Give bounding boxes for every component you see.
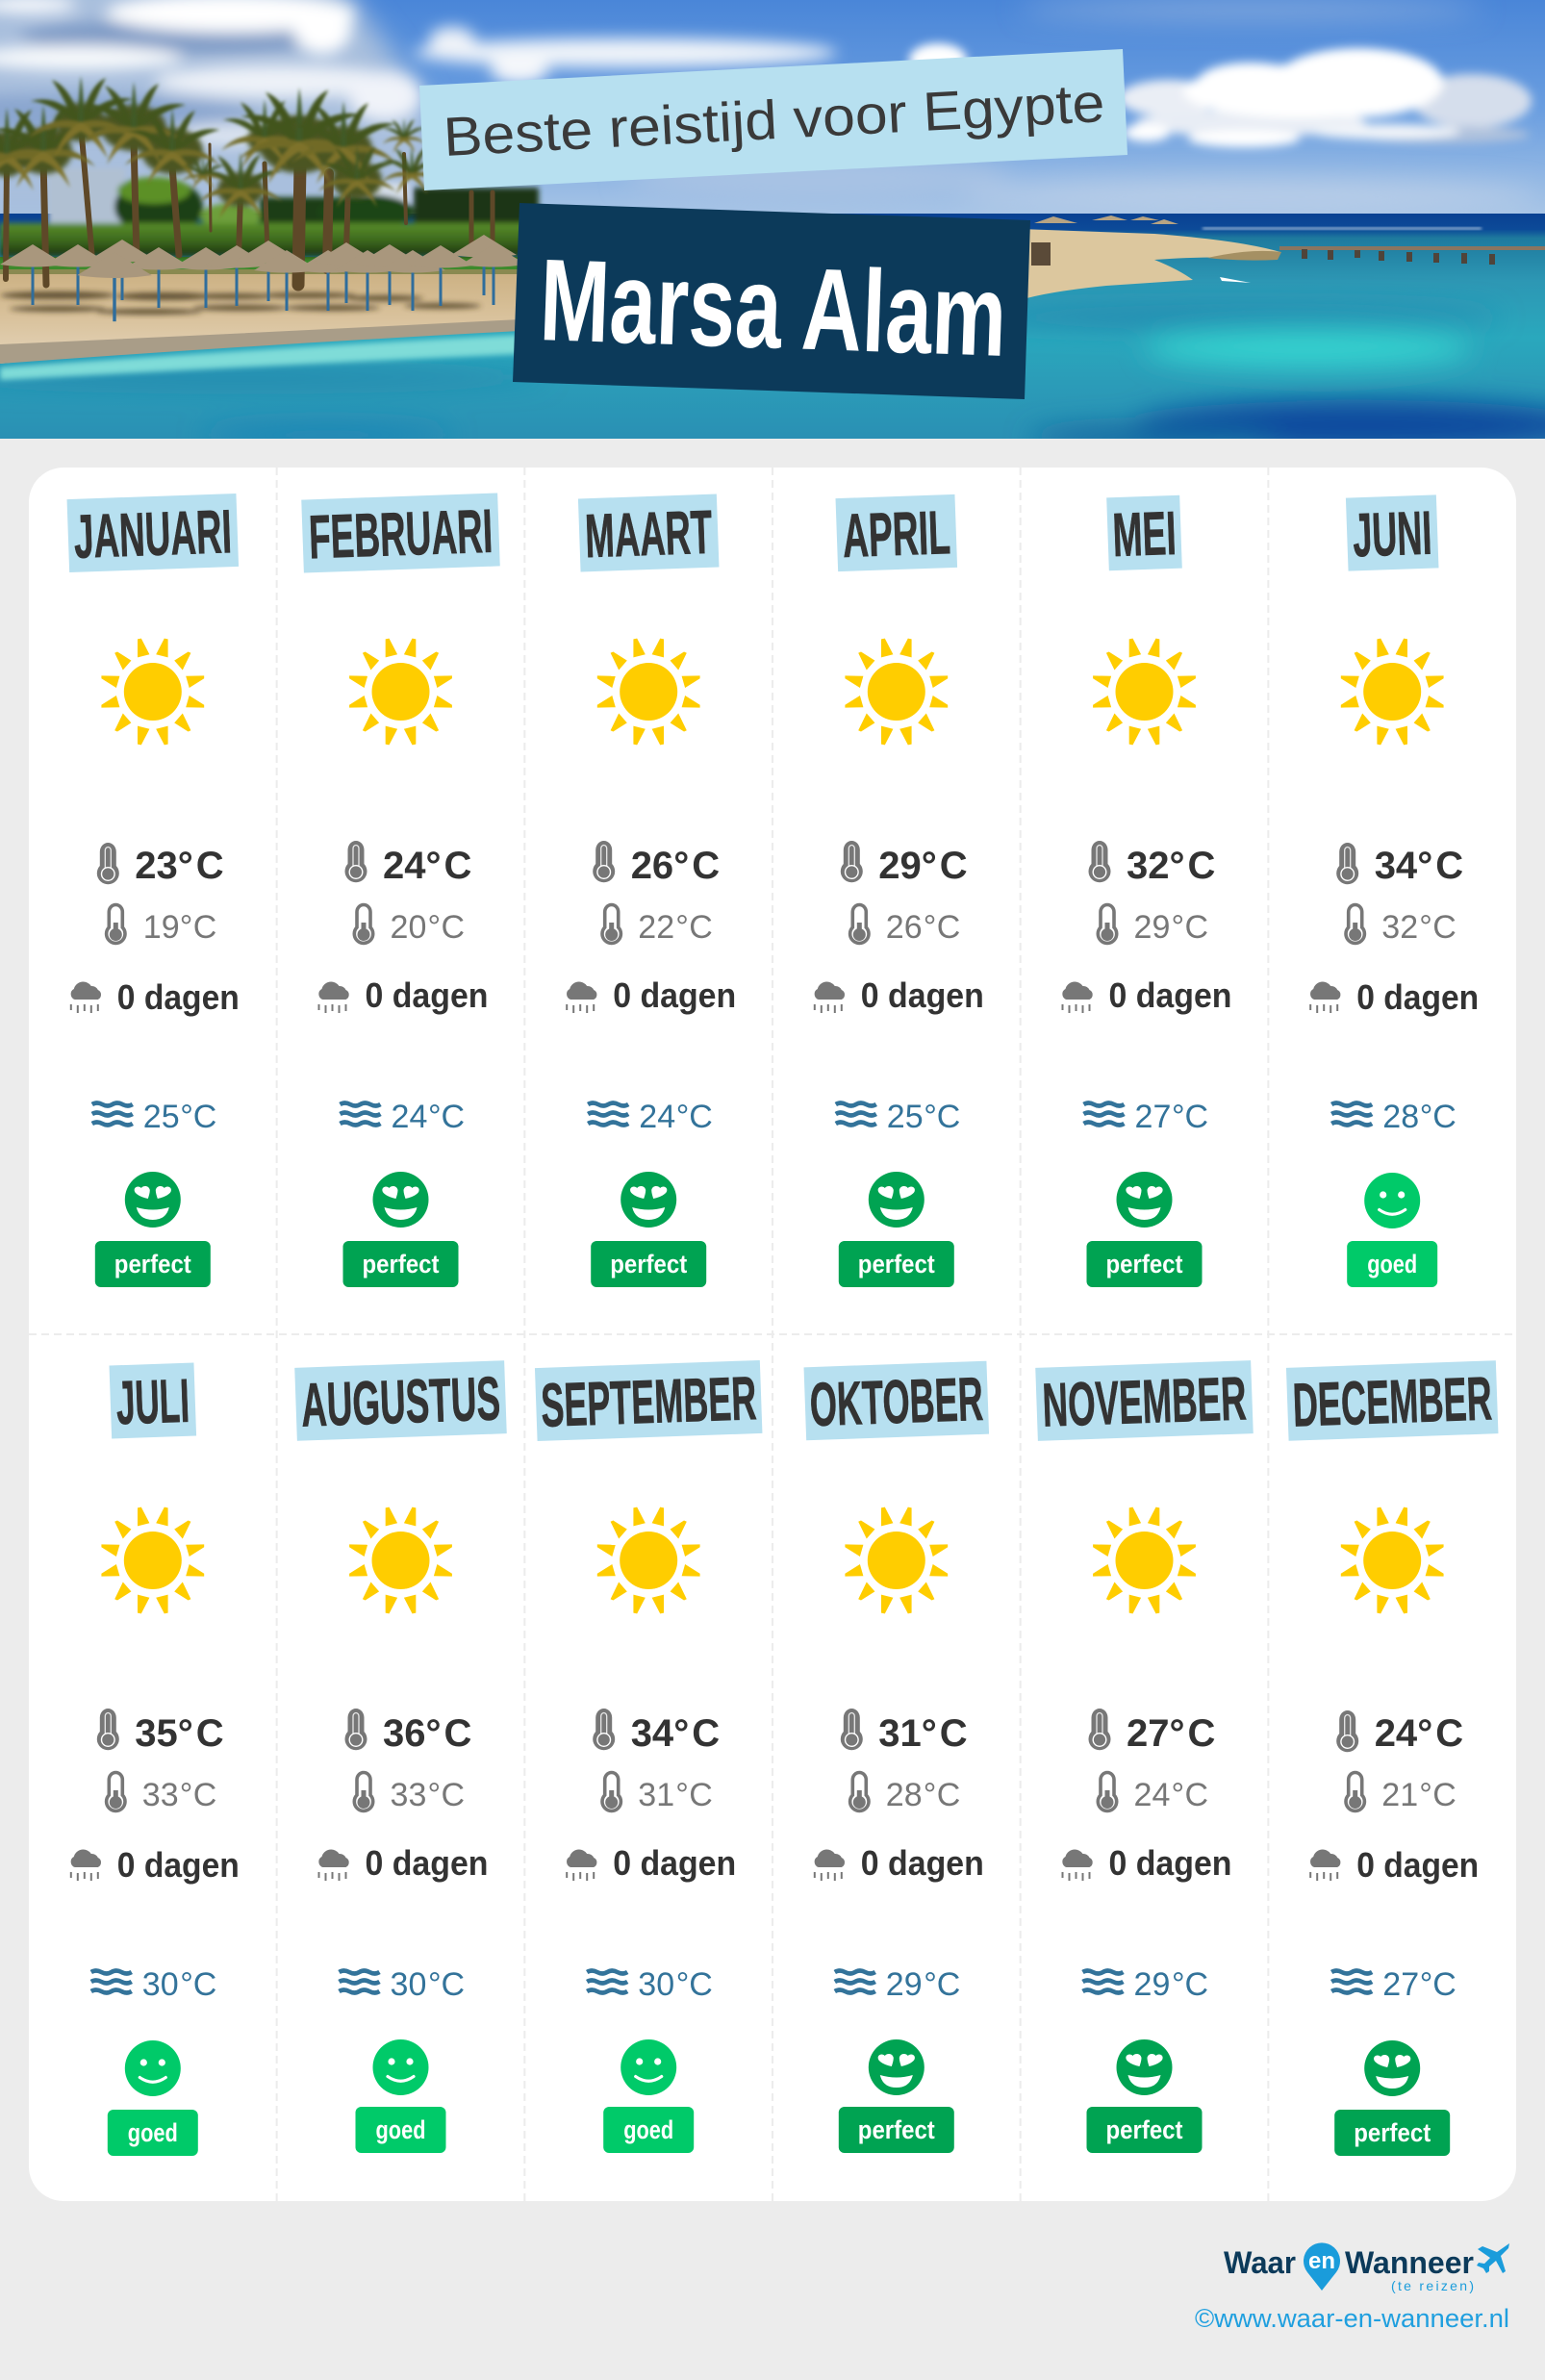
- palm trunks: [6, 125, 493, 285]
- month: september: [535, 1360, 762, 2153]
- max temperature: 24°C: [383, 845, 471, 887]
- icon: thermometer low: [1346, 904, 1364, 943]
- month label: [1106, 495, 1182, 570]
- pier: [1279, 246, 1545, 265]
- icon: sun: [101, 1507, 204, 1613]
- rain days: 0 dagen: [861, 975, 984, 1015]
- min temperature: 33°C: [391, 1777, 465, 1813]
- icon: perfect smiley: [1116, 1172, 1172, 1228]
- rating badge: [1087, 2107, 1203, 2153]
- icon: rain cloud: [318, 1850, 349, 1881]
- rain days: 0 dagen: [117, 977, 240, 1017]
- icon: perfect smiley: [1116, 2039, 1172, 2095]
- max temperature: 31°C: [878, 1712, 968, 1755]
- month label: [578, 494, 719, 571]
- rating badge: [839, 1241, 954, 1287]
- icon: sun: [597, 1507, 700, 1613]
- icon: thermometer low: [354, 1772, 373, 1810]
- rating badge: [95, 1241, 211, 1287]
- rain days: 0 dagen: [366, 1843, 489, 1883]
- min temperature: 22°C: [638, 909, 713, 946]
- icon: thermometer low: [1098, 904, 1117, 943]
- month label: [535, 1360, 762, 1441]
- icon: sun: [1093, 639, 1196, 745]
- month label: [301, 493, 500, 573]
- icon: waves: [587, 1970, 627, 1993]
- min temperature: 26°C: [886, 909, 960, 946]
- icon: thermometer low: [850, 1772, 869, 1810]
- water temperature: 27°C: [1135, 1099, 1208, 1135]
- hero photo: beach resort with palms and turquoise sea: [0, 0, 1545, 450]
- icon: thermometer low: [850, 904, 869, 943]
- month label: NOVEMBER: [1041, 1363, 1248, 1440]
- icon: thermometer high: [1336, 843, 1358, 884]
- icon: airplane: [1477, 2243, 1509, 2273]
- max temperature: 29°C: [878, 845, 968, 887]
- rain days: 0 dagen: [861, 1843, 984, 1883]
- icon: sun: [845, 639, 948, 745]
- min temperature: 31°C: [638, 1777, 713, 1813]
- destination banner: Marsa Alam: Marsa Alam: [538, 234, 1009, 381]
- palm crown masses: [0, 103, 382, 207]
- water temperature: 24°C: [391, 1099, 465, 1135]
- icon: perfect smiley: [125, 1172, 181, 1228]
- icon: waves: [1083, 1970, 1124, 1993]
- max temperature: 36°C: [383, 1712, 471, 1755]
- logo: Waar en Wanneer: Wanneer: [1345, 2245, 1474, 2280]
- month: juni: [1310, 494, 1479, 1287]
- icon: rain cloud: [1062, 982, 1093, 1013]
- rating badge: perfect: [362, 1250, 440, 1279]
- logo: Waar en Wanneer: Waar: [1224, 2245, 1296, 2280]
- logo: Waar en Wanneer: (te reizen): [1391, 2278, 1474, 2293]
- icon: rain cloud: [1062, 1850, 1093, 1881]
- icon: map pin: en: [1308, 2248, 1335, 2274]
- month label: [110, 1362, 196, 1439]
- rating badge: [356, 2107, 446, 2153]
- title banner: Beste reistijd voor Egypte: [419, 49, 1127, 190]
- icon: rain cloud: [318, 982, 349, 1013]
- month label: MEI: [1111, 498, 1178, 570]
- rating badge: perfect: [858, 1250, 935, 1279]
- rating badge: [1334, 2110, 1450, 2156]
- icon: perfect smiley: [373, 1172, 429, 1228]
- icon: sun: [597, 639, 700, 745]
- icon: good smiley: [125, 2040, 181, 2096]
- rating badge: perfect: [610, 1250, 687, 1279]
- logo: Waar en Wanneer: [1224, 2242, 1509, 2293]
- max temperature: 23°C: [135, 845, 224, 887]
- min temperature: 21°C: [1381, 1777, 1456, 1813]
- month label: JUNI: [1352, 498, 1432, 570]
- calendar panel: 12 months: [29, 468, 1516, 2201]
- icon: sun: [1341, 639, 1444, 745]
- water temperature: 30°C: [142, 1966, 216, 2003]
- icon: rain cloud: [1310, 982, 1340, 1013]
- min temperature: 28°C: [886, 1777, 960, 1813]
- water temperature: 24°C: [639, 1099, 713, 1135]
- month label: AUGUSTUS: [300, 1363, 501, 1440]
- rain days: 0 dagen: [613, 1843, 736, 1883]
- icon: rain cloud: [815, 1850, 845, 1881]
- icon: sun: [101, 639, 204, 745]
- water temperature: 25°C: [143, 1099, 216, 1135]
- rating badge: [839, 2107, 954, 2153]
- icon: rain cloud: [567, 1850, 596, 1881]
- icon: perfect smiley: [621, 1172, 676, 1228]
- icon: waves: [836, 1102, 876, 1126]
- month label: FEBRUARI: [308, 496, 494, 571]
- icon: thermometer low: [107, 904, 125, 943]
- rain days: 0 dagen: [1356, 977, 1479, 1017]
- palm crowns: [0, 76, 443, 218]
- title banner: Beste reistijd voor Egypte: Beste reistijd voor Egypte: [442, 72, 1106, 168]
- icon: good smiley: [1364, 1173, 1420, 1228]
- icon: perfect smiley: [869, 2039, 924, 2095]
- month: juli: [71, 1362, 240, 2156]
- month: oktober: [804, 1361, 989, 2153]
- month: april: [815, 494, 984, 1287]
- icon: perfect smiley: [869, 1172, 924, 1228]
- rain days: 0 dagen: [1356, 1845, 1479, 1885]
- rain days: 0 dagen: [117, 1845, 240, 1885]
- icon: map pin: [1304, 2242, 1340, 2291]
- water temperature: 25°C: [887, 1099, 960, 1135]
- icon: thermometer high: [97, 1709, 119, 1750]
- rating badge: [342, 1241, 458, 1287]
- icon: thermometer high: [1089, 1709, 1110, 1750]
- left land: [0, 274, 518, 364]
- month label: OKTOBER: [809, 1364, 984, 1439]
- rating badge: goed: [623, 2115, 673, 2144]
- rain days: 0 dagen: [613, 975, 736, 1015]
- icon: waves: [835, 1970, 875, 1993]
- min temperature: 19°C: [143, 909, 216, 946]
- month: december: [1286, 1360, 1498, 2156]
- icon: thermometer low: [1098, 1772, 1117, 1810]
- rating badge: perfect: [1106, 1250, 1183, 1279]
- icon: waves: [91, 1970, 132, 1993]
- rain days: 0 dagen: [1108, 1843, 1231, 1883]
- icon: good smiley: [621, 2039, 676, 2095]
- max temperature: 24°C: [1375, 1712, 1463, 1755]
- max temperature: 32°C: [1127, 845, 1215, 887]
- icon: thermometer high: [1089, 841, 1110, 882]
- month: maart: [567, 494, 736, 1287]
- icon: thermometer high: [344, 1709, 367, 1750]
- icon: good smiley: [373, 2039, 429, 2095]
- icon: rain cloud: [71, 982, 101, 1013]
- rating badge: perfect: [1106, 2115, 1183, 2144]
- month label: JULI: [115, 1366, 190, 1437]
- rating badge: perfect: [1354, 2118, 1431, 2147]
- rating badge: goed: [375, 2115, 425, 2144]
- month: februari: [301, 493, 500, 1287]
- month: november: [1035, 1360, 1254, 2153]
- water temperature: 29°C: [1133, 1966, 1208, 2003]
- water temperature: 29°C: [886, 1966, 960, 2003]
- rating badge: [591, 1241, 706, 1287]
- beach umbrellas: [0, 235, 526, 321]
- rating badge: [1087, 1241, 1203, 1287]
- month label: MAART: [584, 497, 713, 570]
- icon: waves: [1083, 1102, 1124, 1126]
- water temperature: 27°C: [1382, 1966, 1456, 2003]
- month: augustus: [294, 1360, 507, 2153]
- month label: [294, 1360, 507, 1441]
- icon: rain cloud: [1310, 1850, 1340, 1881]
- rating badge: goed: [1367, 1250, 1417, 1279]
- icon: waves: [1331, 1970, 1372, 1993]
- water temperature: 28°C: [1382, 1099, 1456, 1135]
- icon: thermometer high: [97, 843, 119, 884]
- max temperature: 34°C: [631, 1712, 720, 1755]
- min temperature: 24°C: [1133, 1777, 1208, 1813]
- icon: waves: [339, 1970, 379, 1993]
- rating badge: goed: [128, 2118, 178, 2147]
- rain days: 0 dagen: [366, 975, 489, 1015]
- icon: waves: [341, 1102, 381, 1126]
- min temperature: 29°C: [1133, 909, 1208, 946]
- rating badge: [1347, 1241, 1437, 1287]
- icon: sun: [1341, 1507, 1444, 1613]
- icon: thermometer high: [841, 1709, 863, 1750]
- icon: thermometer high: [593, 1709, 615, 1750]
- month label: APRIL: [842, 497, 951, 570]
- rating badge: [603, 2107, 694, 2153]
- icon: thermometer low: [602, 1772, 621, 1810]
- month label: [836, 494, 957, 571]
- right beach: [1020, 229, 1280, 300]
- water temperature: 30°C: [638, 1966, 713, 2003]
- rating badge: perfect: [858, 2115, 935, 2144]
- icon: thermometer high: [841, 841, 863, 882]
- icon: thermometer low: [107, 1772, 125, 1810]
- far umbrellas: [1034, 215, 1178, 224]
- icon: perfect smiley: [1364, 2040, 1420, 2096]
- month label: JANUARI: [73, 496, 233, 571]
- rating badge: [108, 2110, 198, 2156]
- month label: [1346, 494, 1438, 571]
- icon: sun: [349, 639, 452, 745]
- water temperature: 30°C: [391, 1966, 465, 2003]
- month label: [1035, 1360, 1254, 1441]
- icon: thermometer high: [1336, 1710, 1358, 1752]
- max temperature: 27°C: [1127, 1712, 1215, 1755]
- month label: [804, 1361, 989, 1440]
- min temperature: 32°C: [1381, 909, 1456, 946]
- icon: rain cloud: [71, 1850, 101, 1881]
- icon: waves: [588, 1102, 628, 1126]
- icon: thermometer low: [354, 904, 373, 943]
- month: januari: [67, 494, 240, 1287]
- max temperature: 26°C: [631, 845, 720, 887]
- max temperature: 35°C: [135, 1712, 224, 1755]
- rating badge: perfect: [114, 1250, 191, 1279]
- icon: thermometer high: [593, 841, 615, 882]
- icon: thermometer low: [1346, 1772, 1364, 1810]
- max temperature: 34°C: [1375, 845, 1463, 887]
- icon: sun: [349, 1507, 452, 1613]
- website credit: ©www.waar-en-wanneer.nl: [1195, 2304, 1509, 2333]
- destination banner: Marsa Alam: [513, 203, 1030, 399]
- month: mei: [1062, 495, 1231, 1287]
- icon: thermometer high: [344, 841, 367, 882]
- icon: sun: [1093, 1507, 1196, 1613]
- icon: sun: [845, 1507, 948, 1613]
- icon: thermometer low: [602, 904, 621, 943]
- month label: [67, 494, 239, 572]
- icon: rain cloud: [567, 982, 596, 1013]
- icon: rain cloud: [815, 982, 845, 1013]
- icon: waves: [1331, 1102, 1372, 1126]
- min temperature: 20°C: [391, 909, 465, 946]
- rain days: 0 dagen: [1108, 975, 1231, 1015]
- min temperature: 33°C: [142, 1777, 216, 1813]
- month label: SEPTEMBER: [540, 1363, 757, 1440]
- icon: waves: [92, 1102, 133, 1126]
